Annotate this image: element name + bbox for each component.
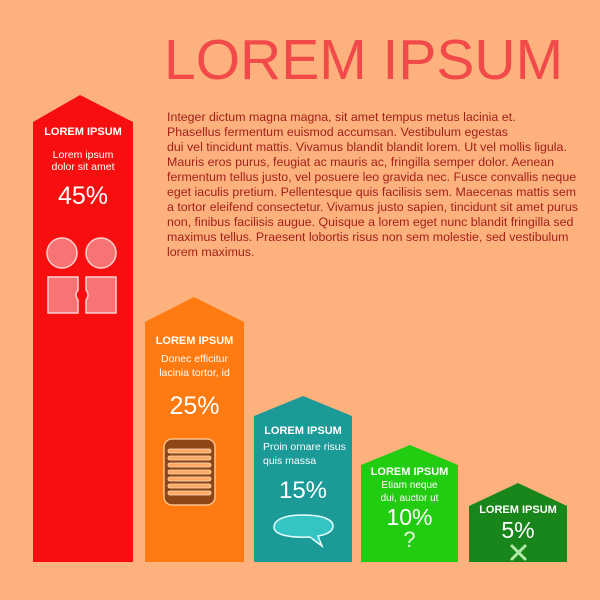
bar: orange 25% [145, 297, 244, 562]
red bar text: 45% [58, 182, 108, 210]
bar: red 45% [33, 95, 133, 562]
bar: green 10% [361, 445, 458, 562]
title: LOREM IPSUM [164, 28, 563, 92]
green bar text: LOREM IPSUM [371, 466, 448, 478]
red bar text: Lorem ipsum [53, 149, 113, 161]
bar: dark green 5% [469, 483, 567, 562]
icon: cross [512, 546, 525, 559]
teal bar text: LOREM IPSUM [264, 425, 342, 437]
teal bar text: Proin ornare risus [263, 441, 346, 453]
icon: document [164, 439, 215, 505]
icon: question mark: ? [403, 527, 416, 552]
green bar text: 10% [386, 504, 433, 530]
red bar text: LOREM IPSUM [44, 126, 122, 138]
orange bar text: LOREM IPSUM [156, 335, 233, 347]
orange bar text: 25% [169, 392, 220, 420]
body paragraph: Integer dictum magna magna, sit amet tempus metus lacinia et. [167, 110, 515, 124]
teal bar text [263, 425, 346, 504]
body paragraph: lorem maximus. [167, 245, 254, 259]
green bar text: Etiam neque [381, 480, 438, 491]
orange bar text: lacinia tortor, id [159, 367, 230, 379]
teal bar text: quis massa [263, 455, 316, 467]
body paragraph: fermentum tellus justo, vel posuere leo gravida nec. Fusce convallis neque [167, 170, 576, 184]
body paragraph: Mauris eros purus, feugiat ac mauris ac, fringilla semper dolor. Aenean [167, 155, 554, 169]
orange bar text: Donec efficitur [161, 353, 228, 365]
green bar text [371, 466, 448, 552]
icon: two people [47, 238, 116, 313]
icon: speech bubble [274, 515, 333, 546]
red bar text: dolor sit amet [51, 161, 115, 173]
body paragraph: a tortor eleifend consectetur. Vivamus justo sapien, tincidunt sit amet purus [167, 200, 578, 214]
body paragraph: eget iaculis pretium. Pellentesque quis facilisis sem. Maecenas mattis sem [167, 185, 576, 199]
body paragraph: maximus tellus. Praesent lobortis risus non sem molestie, sed vestibulum [167, 230, 568, 244]
orange bar text [156, 335, 233, 420]
dark green bar text: LOREM IPSUM [479, 504, 557, 516]
body paragraph: Phasellus fermentum euismod accumsan. Vestibulum egestas [167, 125, 508, 139]
dark green bar text: 5% [501, 517, 535, 543]
dark green bar text [479, 504, 557, 543]
green bar text: dui, auctor ut [381, 493, 438, 504]
body paragraph: non, finibus facilisis augue. Quisque a lorem eget nunc blandit fringilla sed [167, 215, 573, 229]
bar: teal 15% [254, 396, 352, 562]
body paragraph [167, 110, 578, 259]
teal bar text: 15% [279, 477, 327, 504]
red bar text [44, 126, 122, 210]
body paragraph: dui vel tincidunt mattis. Vivamus blandit blandit lorem. Ut vel mollis ligula. [167, 140, 567, 154]
